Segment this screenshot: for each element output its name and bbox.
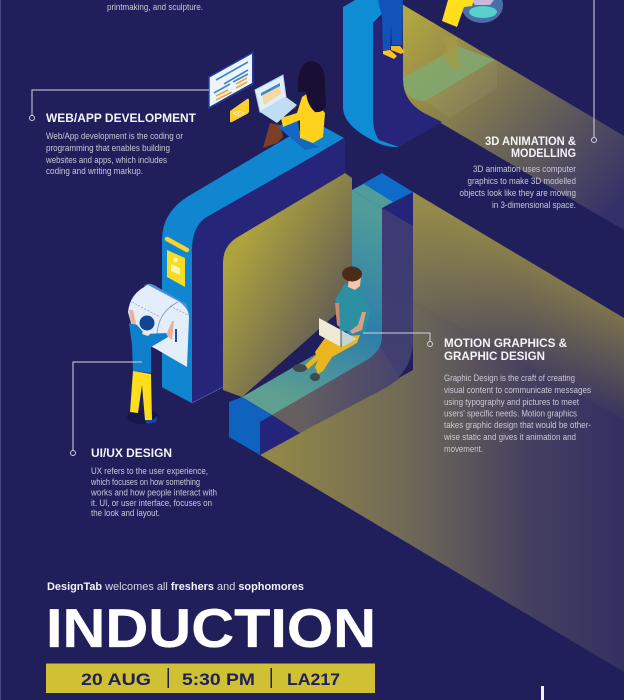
- J top face: [242, 190, 382, 415]
- icon: code screen: [209, 52, 253, 108]
- text block: 3D animation: objects look like they are moving: [460, 188, 576, 199]
- text block: 3D animation: graphics to make 3D modelled: [468, 176, 576, 187]
- figure: standing person with globe: [442, 0, 503, 27]
- text block: 3D animation: 3D animation uses computer: [473, 164, 576, 175]
- callout: web/app: [30, 90, 209, 120]
- callout: motion graphics: [363, 333, 432, 346]
- U seat: lower J shape: [229, 173, 413, 455]
- page edge: [0, 0, 1, 700]
- text block: UI/UX design: it. UI, or user interface, focuses on: [91, 498, 212, 509]
- event bar: [46, 664, 375, 693]
- text block: motion graphics: Graphic Design is the craft of creating: [444, 373, 575, 384]
- event bar: 5:30 PM: [182, 670, 255, 689]
- figure: person at kiosk: [127, 310, 174, 424]
- text block: web/app development: websites and apps, which includes: [45, 155, 167, 166]
- arch blue face: [162, 122, 344, 403]
- text block: motion graphics: GRAPHIC DESIGN: [444, 351, 545, 363]
- icon: code tag: </>: [233, 109, 245, 118]
- text block: motion graphics: [443, 338, 591, 455]
- icon: code tag: [230, 99, 249, 122]
- text block: web/app development: programming that enables building: [46, 143, 170, 154]
- callout: UI/UX: [70, 362, 142, 456]
- text block: 3D animation: MODELLING: [511, 148, 576, 160]
- text block: UI/UX design: UX refers to the user experience,: [91, 466, 208, 477]
- text block: motion graphics: using typography and pictures to meet: [444, 397, 579, 408]
- light beam: upper: [395, 0, 624, 230]
- arch: lower-left platform and ATM column: [162, 122, 345, 403]
- callout: bottom line: [541, 686, 544, 700]
- text block: motion graphics: users' specific needs. Motion graphics: [444, 408, 577, 420]
- text block: motion graphics: wise static and gives it animation and: [443, 432, 576, 443]
- arch dark face: [192, 138, 345, 403]
- text block: UI/UX design: [90, 448, 217, 519]
- upper U column: [343, 0, 442, 147]
- figure: person with laptop on seat: [293, 266, 370, 381]
- title: INDUCTION: [46, 597, 376, 659]
- text block: 3D animation: in 3-dimensional space.: [492, 200, 576, 211]
- figure: woman with laptop on arch: [255, 61, 326, 150]
- ATM sign: [167, 239, 187, 287]
- text block: motion graphics: visual content to communicate messages: [444, 385, 591, 396]
- text block: web/app development: coding and writing markup.: [46, 166, 143, 177]
- light beam: lower: [223, 173, 624, 672]
- J end cap: [229, 397, 272, 455]
- text block: 3D animation: [460, 136, 576, 211]
- text block: web/app development: WEB/APP DEVELOPMENT: [46, 113, 196, 125]
- text block: UI/UX design: which focuses on how something: [90, 477, 200, 488]
- callout: 3D animation: [592, 0, 596, 142]
- laptop: [255, 75, 286, 112]
- J dark face: [367, 192, 413, 395]
- J top cap: [352, 173, 413, 208]
- text block: motion graphics: movement.: [444, 444, 483, 455]
- J dark face lower run: [272, 346, 400, 433]
- text block: UI/UX design: the look and layout.: [91, 508, 160, 519]
- text block: web/app development: [45, 113, 196, 177]
- text: welcome line: DesignTab welcomes all freshers and sophomores: [47, 581, 304, 593]
- text block: motion graphics: MOTION GRAPHICS &: [444, 338, 567, 350]
- text block: UI/UX design: UI/UX DESIGN: [91, 448, 172, 460]
- text block: 3D animation: 3D ANIMATION &: [485, 136, 576, 148]
- text: fine art fragment: printmaking, and sculpture.: [107, 2, 203, 13]
- figure: seated person on upper column: [378, 0, 405, 59]
- text block: UI/UX design: works and how people interact with: [90, 488, 217, 498]
- ATM kiosk: [128, 284, 190, 367]
- event bar: 20 AUG: [81, 670, 151, 689]
- text block: web/app development: Web/App development is the coding or: [46, 131, 183, 142]
- text block: motion graphics: takes graphic design that would be other-: [444, 420, 591, 431]
- event bar: LA217: [287, 670, 340, 689]
